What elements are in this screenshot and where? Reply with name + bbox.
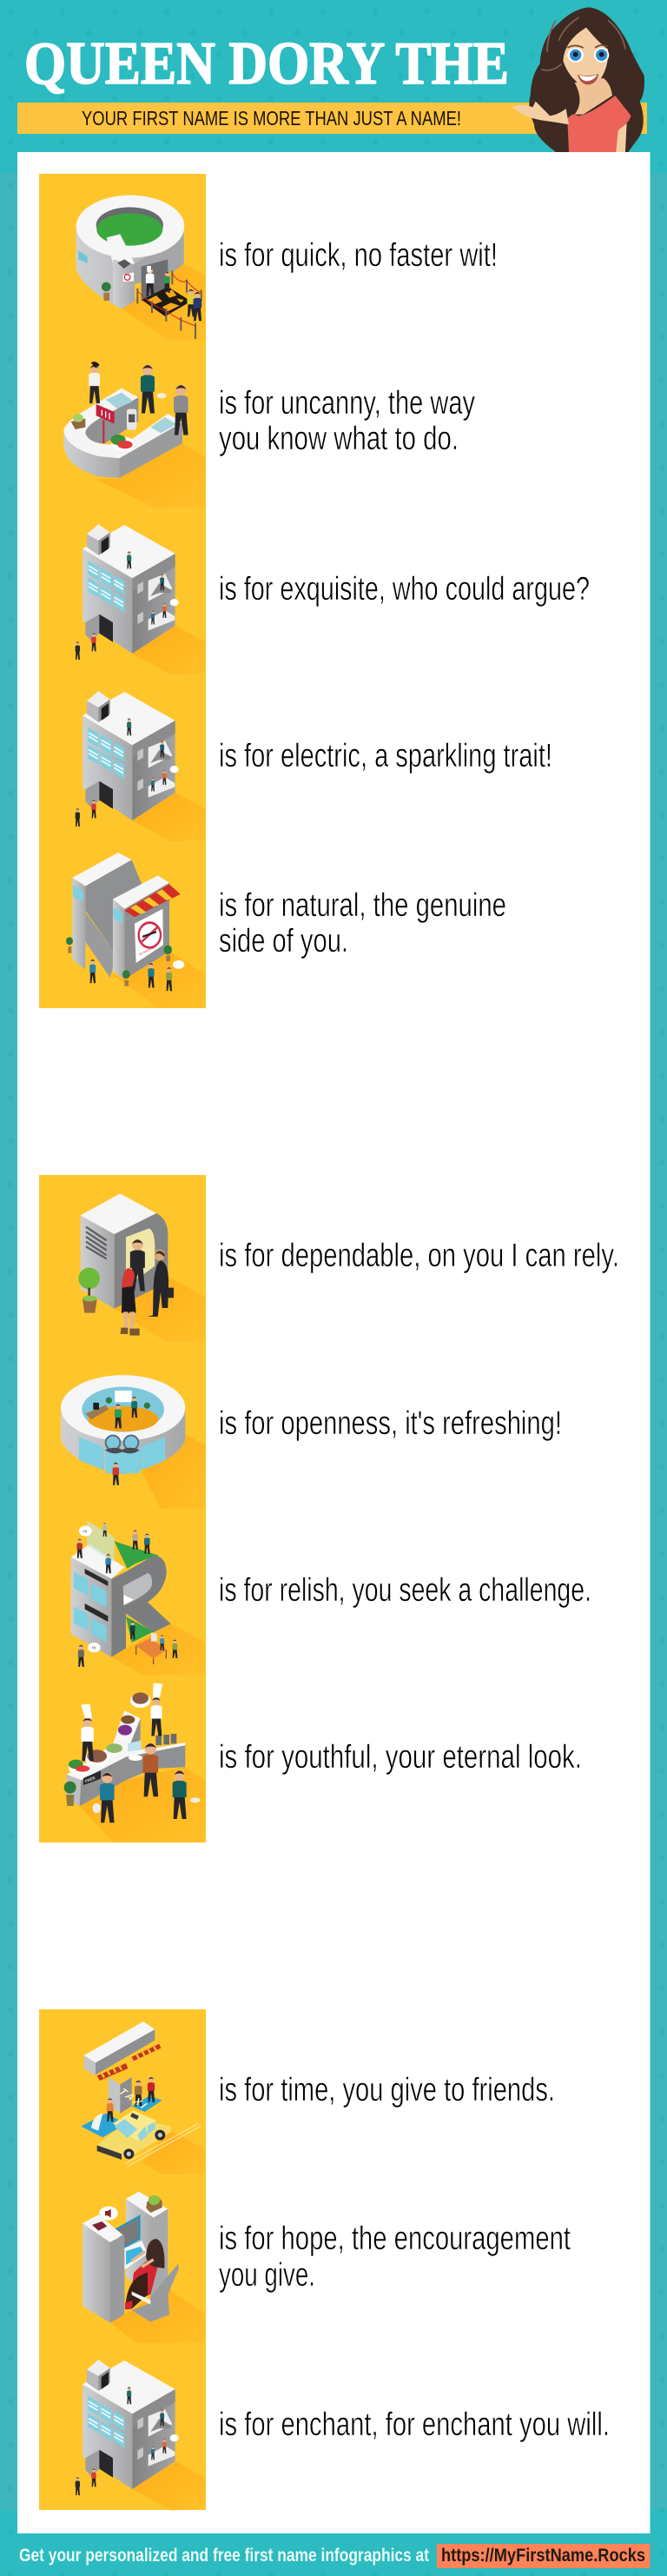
tile background E bbox=[39, 508, 206, 674]
row: N bbox=[39, 841, 506, 1008]
tile background U bbox=[39, 341, 206, 508]
row: U bbox=[39, 341, 475, 508]
row: E (enchant) bbox=[39, 2343, 610, 2510]
row: O bbox=[39, 1342, 562, 1512]
text: H lines: you give. bbox=[219, 2257, 315, 2294]
row: D bbox=[39, 1175, 619, 1342]
tile background Y bbox=[39, 1676, 206, 1842]
illustration: letter Y buffet: FREE bbox=[84, 1776, 96, 1783]
footer link box bbox=[437, 2544, 650, 2568]
icon: cartoon woman presenter bbox=[512, 7, 644, 152]
tile background N bbox=[39, 841, 206, 1008]
text: T line: is for time, you give to friends. bbox=[219, 2072, 555, 2108]
illustration: letter Q stadium bbox=[76, 196, 205, 341]
illustration: letter D meeting bbox=[78, 1193, 206, 1342]
illustration: letter N shop: NO SMOKING bbox=[139, 946, 155, 957]
text: U lines: is for uncanny, the way bbox=[219, 385, 475, 422]
illustration: letter R office: HI bbox=[92, 1645, 96, 1650]
text: U lines bbox=[219, 385, 475, 457]
illustration: letter E office bbox=[76, 2360, 206, 2510]
tile background O bbox=[39, 1342, 206, 1509]
illustration: letter R office: HI bbox=[83, 1529, 87, 1533]
text: U lines: you know what to do. bbox=[219, 421, 459, 457]
illustration: letter E office bbox=[76, 691, 206, 841]
illustration: letter T taxi stand: TAXI bbox=[116, 2087, 149, 2110]
tile background H bbox=[39, 2176, 206, 2343]
text: Q line: is for quick, no faster wit! bbox=[219, 237, 498, 274]
illustration: letter N shop bbox=[66, 853, 206, 1008]
subtitle banner bbox=[17, 103, 647, 134]
row: T bbox=[39, 2009, 555, 2176]
footer bbox=[19, 2544, 650, 2568]
row: H bbox=[39, 2176, 571, 2347]
subtitle banner: YOUR FIRST NAME IS MORE THAN JUST A NAME! bbox=[82, 107, 461, 129]
text: E line: is for electric, a sparkling trait! bbox=[219, 738, 552, 774]
text: N lines bbox=[219, 887, 506, 959]
illustration: letter U buffet counter bbox=[63, 362, 206, 508]
illustration: letter E office bbox=[76, 524, 206, 674]
illustration: letter Y buffet bbox=[64, 1683, 206, 1842]
text: H lines: is for hope, the encouragement bbox=[219, 2221, 571, 2257]
row: E (electric) bbox=[39, 674, 552, 841]
illustration: letter O optician bbox=[61, 1375, 206, 1512]
row: E (exquisite) bbox=[39, 508, 590, 674]
tile background Q bbox=[39, 174, 206, 341]
tile background E bbox=[39, 674, 206, 841]
tile background E bbox=[39, 2343, 206, 2510]
text: N lines: is for natural, the genuine bbox=[219, 887, 506, 924]
text: O line: is for openness, it's refreshing! bbox=[219, 1405, 562, 1442]
row: R bbox=[39, 1509, 591, 1676]
tile background R bbox=[39, 1509, 206, 1676]
tile background D bbox=[39, 1175, 206, 1342]
row: Q bbox=[39, 174, 498, 341]
text: H lines bbox=[219, 2221, 571, 2294]
row: Y bbox=[39, 1676, 582, 1842]
illustration: letter R office bbox=[71, 1521, 206, 1675]
tile background T bbox=[39, 2009, 206, 2176]
title: QUEEN DORY THE bbox=[24, 30, 509, 97]
illustration: letter H workstation bbox=[83, 2192, 206, 2347]
text: N lines: side of you. bbox=[219, 923, 348, 959]
illustration: letter T taxi stand bbox=[81, 2022, 206, 2174]
footer text: Get your personalized and free first name infographics at bbox=[19, 2546, 429, 2566]
